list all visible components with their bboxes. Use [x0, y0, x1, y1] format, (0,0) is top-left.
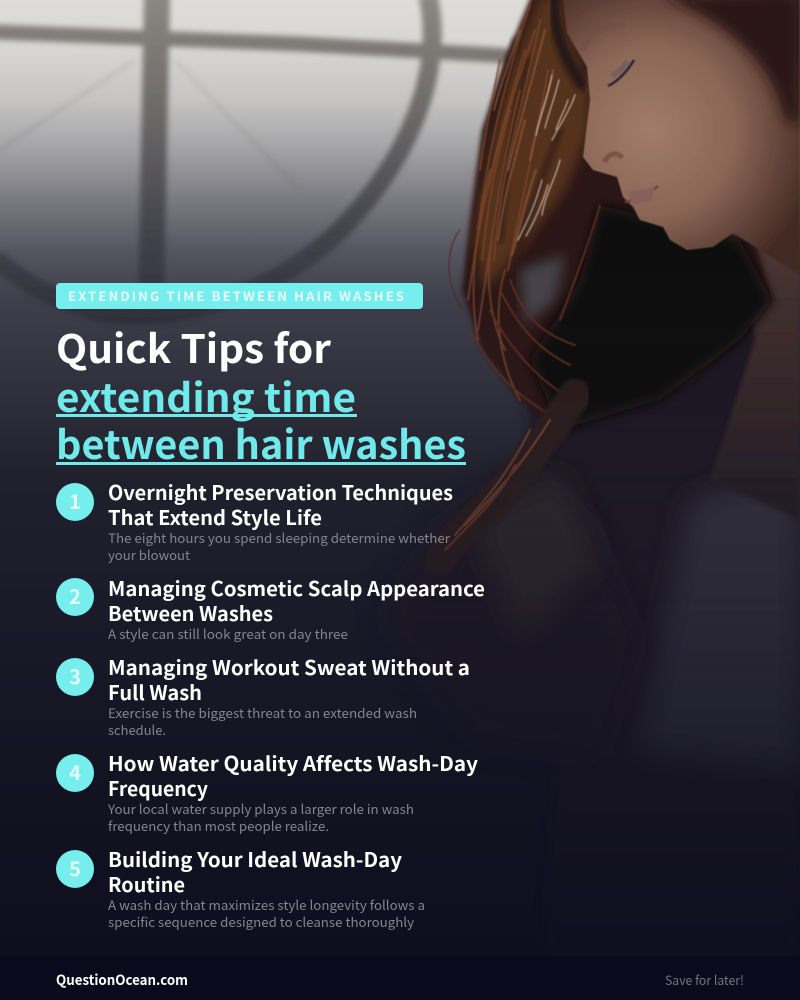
title: Quick Tips for: [56, 319, 332, 375]
woman: crown hair: [660, 0, 800, 125]
title: [56, 319, 466, 471]
tip 3: Exercise is the biggest threat to an extended wash: [108, 703, 417, 722]
tip 1: Overnight Preservation Techniques: [108, 477, 453, 506]
woman: braid: [440, 395, 575, 560]
title: extending time: [56, 368, 356, 424]
tip 2: Managing Cosmetic Scalp Appearance: [108, 573, 485, 602]
window frame: [0, 0, 510, 315]
tip 5: Building Your Ideal Wash-Day: [108, 844, 403, 873]
tip 4: 4: [69, 757, 81, 786]
footer: Save for later!: [665, 970, 744, 989]
tip 3: schedule.: [108, 720, 166, 739]
tip 5: A wash day that maximizes style longevity follows a: [108, 895, 425, 914]
tip 1: your blowout: [108, 545, 190, 564]
woman: body: [484, 274, 800, 763]
footer: [0, 956, 800, 1000]
tip 2: 2: [69, 581, 81, 610]
tip 1: [56, 477, 453, 564]
tip 4: Your local water supply plays a larger role in wash: [107, 799, 414, 818]
woman: [426, 0, 800, 763]
tip 4: How Water Quality Affects Wash-Day: [108, 748, 479, 777]
woman: hair back mass: [462, 0, 772, 430]
tip 1: The eight hours you spend sleeping determine whether: [108, 528, 451, 547]
title: between hair washes: [56, 415, 466, 471]
tip 5: Routine: [108, 869, 185, 898]
tip 4: Frequency: [108, 773, 208, 802]
tip 5: specific sequence designed to cleanse thoroughly: [108, 912, 414, 931]
woman: hair strands: [449, 0, 600, 420]
tip 2: Between Washes: [108, 598, 273, 627]
tip 5: [56, 844, 425, 931]
tip 4: frequency than most people realize.: [108, 816, 329, 835]
woman: face: [562, 0, 800, 275]
tip 2: A style can still look great on day three: [108, 624, 348, 643]
tip 5: 5: [69, 853, 81, 882]
tip 3: 3: [69, 661, 81, 690]
woman: brow, eye, nose, lips: [602, 59, 659, 204]
woman: neck: [714, 112, 800, 518]
tip 3: Managing Workout Sweat Without a: [108, 652, 470, 681]
footer: QuestionOcean.com: [56, 970, 188, 990]
tip 2: [56, 573, 485, 643]
tag pill: [56, 283, 423, 309]
tip 4: [56, 748, 479, 835]
tag pill: EXTENDING TIME BETWEEN HAIR WASHES: [68, 286, 404, 305]
background photo: window and woman: [0, 0, 800, 788]
tip 1: That Extend Style Life: [108, 502, 322, 531]
tip 3: Full Wash: [108, 677, 202, 706]
tip 1: 1: [69, 486, 81, 515]
tip 3: [56, 652, 470, 739]
